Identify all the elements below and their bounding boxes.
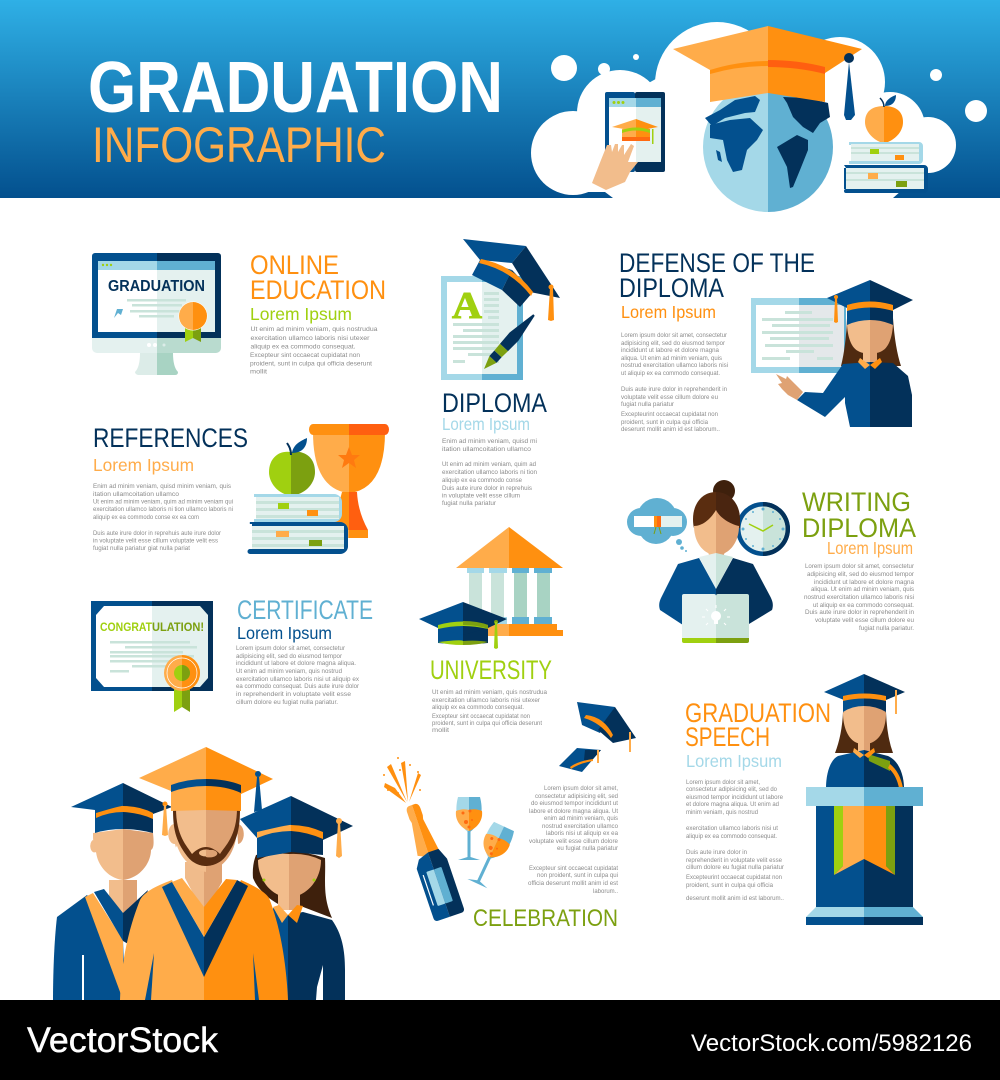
icon: podium bbox=[806, 787, 923, 925]
body text bbox=[236, 645, 360, 706]
panel: university bbox=[419, 527, 563, 734]
header cloud bbox=[531, 22, 987, 198]
panel: references bbox=[93, 423, 389, 554]
body text: nostrud exercitation ullamco bbox=[542, 823, 618, 830]
subheading: Lorem Ipsum bbox=[237, 623, 332, 643]
body text: Duis aute irure dolor in reprehuis aute irure dolor bbox=[93, 530, 222, 537]
body text bbox=[686, 779, 785, 902]
body text: Excepteur sint occaecat cupidatat non bbox=[250, 352, 360, 359]
body text: Lorem ipsum dolor sit amet, consectetur bbox=[236, 645, 346, 652]
subheading: Lorem Ipsum bbox=[250, 304, 352, 324]
icon: wall clock bbox=[736, 502, 790, 556]
body text: fugiat nulla pariatur giat nulla pariat bbox=[93, 545, 190, 552]
body text: Duis aute irure dolor in reprehuis bbox=[442, 485, 533, 492]
panel: diploma bbox=[441, 239, 560, 507]
body text: enim ad minim veniam, quis bbox=[544, 815, 619, 822]
icon: flying caps bbox=[559, 702, 636, 772]
body text: aliquip ex ea commodo conse bbox=[442, 477, 522, 484]
body text: incididunt ut labore et dolore magna bbox=[621, 347, 719, 354]
body text: incididunt ut labore et dolore magna aliqua. bbox=[236, 660, 356, 667]
heading: university: UNIVERSITY bbox=[430, 655, 552, 685]
body text: deserunt mollit anim id est laborum.. bbox=[686, 895, 784, 902]
body text: aliqua. Ut enim ad minim veniam, quis bbox=[811, 586, 915, 593]
body text: proident, sunt in culpa qui officia bbox=[686, 882, 773, 889]
heading: online education: ONLINE bbox=[250, 250, 339, 280]
heading: writing diploma: WRITING bbox=[802, 487, 911, 517]
icon: congratulation certificate bbox=[91, 601, 213, 712]
body text: proident, sunt in culpa qui officia deserunt bbox=[250, 360, 372, 368]
body text: incididunt ut labore et dolore magna bbox=[814, 579, 914, 586]
body text: Ut enim ad minim veniam, quim ad minim veniam qui bbox=[93, 498, 233, 506]
body text: in voluptate velit esse cillum bbox=[442, 492, 520, 500]
figure: presenter woman bbox=[776, 280, 913, 427]
heading: defense of the diploma: DEFENSE OF THE bbox=[619, 248, 815, 278]
body text: voluptate velit esse cillum dolore bbox=[529, 838, 618, 845]
body text: aliqua. Ut enim ad minim veniam, quis bbox=[621, 355, 723, 362]
body text: do eiusmod tempor incididunt ut bbox=[531, 800, 618, 807]
icon: congratulation certificate: CONGRAT bbox=[100, 620, 153, 634]
body text: aliquip ex ea commodo consequat. bbox=[250, 344, 356, 350]
body text: in reprehenderit in voluptate velit esse bbox=[236, 691, 351, 698]
body text: Ut enim ad minim veniam, quim ad bbox=[442, 461, 536, 468]
icon: globe bbox=[703, 82, 833, 212]
body text: voluptate velit esse cillum dolore eu bbox=[815, 617, 914, 624]
heading: diploma: DIPLOMA bbox=[442, 388, 547, 418]
body text: Excepteur sint occaecat cupidatat non bbox=[432, 713, 530, 720]
panel: online education bbox=[92, 250, 386, 376]
heading: celebration: CELEBRATION bbox=[473, 905, 618, 932]
body text: exercitation ullamco laboris nisi ut bbox=[686, 825, 778, 832]
body text bbox=[93, 483, 233, 552]
body text: mollit bbox=[250, 368, 267, 376]
body text: exercitation ullamco laboris nisi utexer bbox=[432, 697, 541, 704]
body text: Lorem ipsum dolor sit amet, bbox=[686, 779, 760, 786]
icon: diploma sheet with cap and pen bbox=[441, 239, 560, 380]
body text: ut aliquip ex ea commodo consequat. bbox=[813, 602, 914, 609]
body text: laboris nisi ut aliquip ex ea bbox=[546, 830, 618, 837]
body text: adipisicing elit, sed do eiusmod tempor bbox=[236, 653, 343, 660]
body text: exercitation ullamco laboris nisi ut aliquip ex bbox=[236, 676, 360, 683]
body text: Excepteurint occaecat cupidatat non bbox=[686, 874, 782, 881]
body text: aliquip ex ea commodo consequat. bbox=[686, 833, 777, 840]
body text: aliquip ex ea commodo consequat. bbox=[432, 704, 524, 711]
body text: Excepteur sint occaecat cupidatat bbox=[529, 865, 618, 872]
body text: deserunt mollit anim id est laborum.. bbox=[621, 426, 720, 433]
body text: voluptate velit esse cillum dolore eu bbox=[621, 394, 718, 401]
body text: ea commodo consequat. Duis aute irure dolor bbox=[236, 683, 360, 690]
heading: online education: EDUCATION bbox=[250, 275, 386, 305]
body text: Ut enim ad minim veniam, quis nostrud bbox=[236, 668, 342, 675]
subheading: Lorem Ipsum bbox=[93, 455, 194, 475]
icon: champagne glass tilted bbox=[465, 821, 516, 889]
body text: nostrud exercitation ullamco laboris nisi bbox=[621, 362, 728, 369]
body text: mollit bbox=[432, 727, 449, 734]
body text: Duis aute irure dolor in reprehenderit in bbox=[805, 609, 914, 616]
body text: cillum dolore eu fugiat nulla pariatur bbox=[686, 864, 785, 871]
icon: champagne bottle bbox=[383, 757, 465, 922]
figure: woman at laptop bbox=[659, 480, 773, 643]
body text: Ut enim ad minim veniam, quis nostrudua bbox=[250, 326, 378, 333]
icon: desktop monitor bbox=[92, 253, 221, 375]
icon: champagne glass upright bbox=[456, 797, 482, 860]
body text bbox=[621, 332, 728, 433]
body text: non proident, sunt in culpa qui bbox=[537, 872, 618, 879]
body text: eu fugiat nulla pariatur bbox=[557, 845, 619, 852]
heading: graduation speech bbox=[685, 698, 831, 752]
figure: graduate centre man with beard bbox=[120, 747, 288, 1000]
body text: minim veniam, quis nostrud bbox=[686, 809, 758, 816]
panel: certificate bbox=[91, 595, 373, 712]
body text: eiusmod tempor incididunt ut labore bbox=[686, 794, 783, 801]
heading: graduation speech: SPEECH bbox=[685, 722, 770, 752]
body text: Enim ad minim veniam, quisd minim veniam, quis bbox=[93, 483, 232, 490]
body text: nostrud exercitation ullamco laboris nisi bbox=[804, 594, 914, 601]
icon: thought bubble with scroll bbox=[627, 498, 687, 552]
heading: certificate: CERTIFICATE bbox=[237, 595, 373, 625]
icon: apple on books bbox=[844, 95, 928, 193]
body text bbox=[432, 689, 547, 734]
figure: speaker woman bbox=[824, 674, 905, 788]
heading: writing diploma bbox=[802, 487, 916, 543]
body text: adipisicing elit, sed do eiusmod tempor bbox=[621, 340, 726, 347]
body text: Duis aute irure dolor in bbox=[686, 849, 747, 856]
figure: graduate right woman bbox=[240, 796, 353, 1000]
subheading: Lorem Ipsum bbox=[621, 302, 716, 322]
body text: proident, sunt in culpa qui officia deserunt bbox=[432, 720, 542, 727]
icon: green apple bbox=[269, 438, 315, 495]
body text: consectetur adipisicing elit, sed bbox=[535, 793, 618, 800]
panel: writing diploma bbox=[627, 480, 916, 643]
icon: desktop monitor: GRADUATION bbox=[108, 278, 205, 295]
figure: graduate left bbox=[53, 783, 172, 1000]
body text: Excepteurint occaecat cupidatat non bbox=[621, 411, 718, 418]
panel: defense of the diploma bbox=[619, 248, 913, 433]
figure group: graduates bbox=[53, 747, 353, 1000]
icon: trophy cup bbox=[309, 424, 389, 538]
body text: Lorem ipsum dolor sit amet, consectetur bbox=[621, 332, 728, 339]
icon: university building bbox=[456, 527, 563, 636]
body text bbox=[804, 563, 915, 632]
heading: defense of the diploma bbox=[619, 248, 815, 303]
body text: Lorem ipsum dolor sit amet, consectetur bbox=[805, 563, 915, 570]
body text: officia deserunt mollit anim id est bbox=[528, 880, 618, 887]
heading: graduation speech: GRADUATION bbox=[685, 698, 831, 728]
heading: online education bbox=[250, 250, 386, 305]
icon: stacked books bbox=[248, 494, 348, 554]
body text: cillum dolore eu fugiat nulla pariatur. bbox=[236, 699, 338, 706]
body text: Lorem ipsum dolor sit amet, bbox=[544, 785, 618, 792]
body text bbox=[528, 785, 619, 895]
body text: exercitation ullamco laboris nisi utexer bbox=[250, 335, 370, 342]
subheading: Lorem Ipsum bbox=[686, 751, 782, 771]
body text: consectetur adipisicing elit, sed do bbox=[686, 786, 777, 793]
body text: Duis aute irure dolor in reprehenderit in bbox=[621, 386, 727, 393]
body text: aliquip ex ea commodo conse ex ea com bbox=[93, 514, 199, 521]
heading: defense of the diploma: DIPLOMA bbox=[619, 273, 724, 303]
logo text: VectorStock bbox=[27, 1021, 219, 1060]
body text: adipisicing elit, sed do eiusmod tempor bbox=[807, 571, 915, 578]
body text: fugiat nulla pariatur bbox=[621, 401, 675, 408]
icon: presentation screen bbox=[751, 298, 846, 373]
body text bbox=[250, 326, 378, 376]
body text: labore et dolore magna aliqua. Ut bbox=[529, 808, 618, 815]
icon: cap with green band bbox=[419, 602, 507, 649]
header banner bbox=[0, 0, 1000, 212]
subtitle: INFOGRAPHIC bbox=[92, 117, 386, 173]
body text: itation ullamcoitation ullamco bbox=[442, 446, 531, 453]
icon: tablet with hand bbox=[592, 92, 665, 190]
body text: Ut enim ad minim veniam, quis nostrudua bbox=[432, 689, 547, 696]
body text: in voluptate velit esse cillum voluptate velit ess bbox=[93, 538, 219, 544]
body text: exercitation ullamco laboris ni tion ullamco laboris ni bbox=[93, 506, 233, 513]
subheading: Lorem Ipsum bbox=[442, 414, 530, 434]
panel: celebration bbox=[383, 702, 636, 932]
body text: ut aliquip ex ea commodo consequat. bbox=[621, 370, 720, 377]
body text: fugiat nulla pariatur bbox=[442, 500, 497, 507]
icon: diploma sheet with cap and pen: A bbox=[452, 285, 483, 327]
body text: laborum.. bbox=[593, 888, 618, 895]
body text: itation ullamcoitation ullamco bbox=[93, 491, 179, 498]
heading: writing diploma: DIPLOMA bbox=[802, 513, 916, 543]
body text: fugiat nulla pariatur. bbox=[859, 625, 914, 632]
url text: VectorStock.com/5982126 bbox=[691, 1030, 972, 1057]
footer: watermark band bbox=[0, 1000, 1000, 1080]
subheading: Lorem Ipsum bbox=[827, 538, 913, 558]
heading: references: REFERENCES bbox=[93, 423, 248, 453]
body text bbox=[442, 438, 537, 507]
icon: large orange cap bbox=[673, 26, 862, 120]
body text: reprehenderit in voluptate velit esse bbox=[686, 857, 782, 864]
body text: et dolore magna aliqua. Ut enim ad bbox=[686, 801, 779, 808]
body text: exercitation ullamco laboris ni tion bbox=[442, 469, 537, 476]
body text: proident, sunt in culpa qui officia bbox=[621, 419, 708, 426]
panel: graduation speech bbox=[685, 674, 923, 925]
icon: congratulation certificate: ULATION! bbox=[152, 620, 204, 634]
main title: GRADUATION bbox=[88, 48, 503, 128]
body text: Enim ad minim veniam, quisd mi bbox=[442, 438, 537, 445]
